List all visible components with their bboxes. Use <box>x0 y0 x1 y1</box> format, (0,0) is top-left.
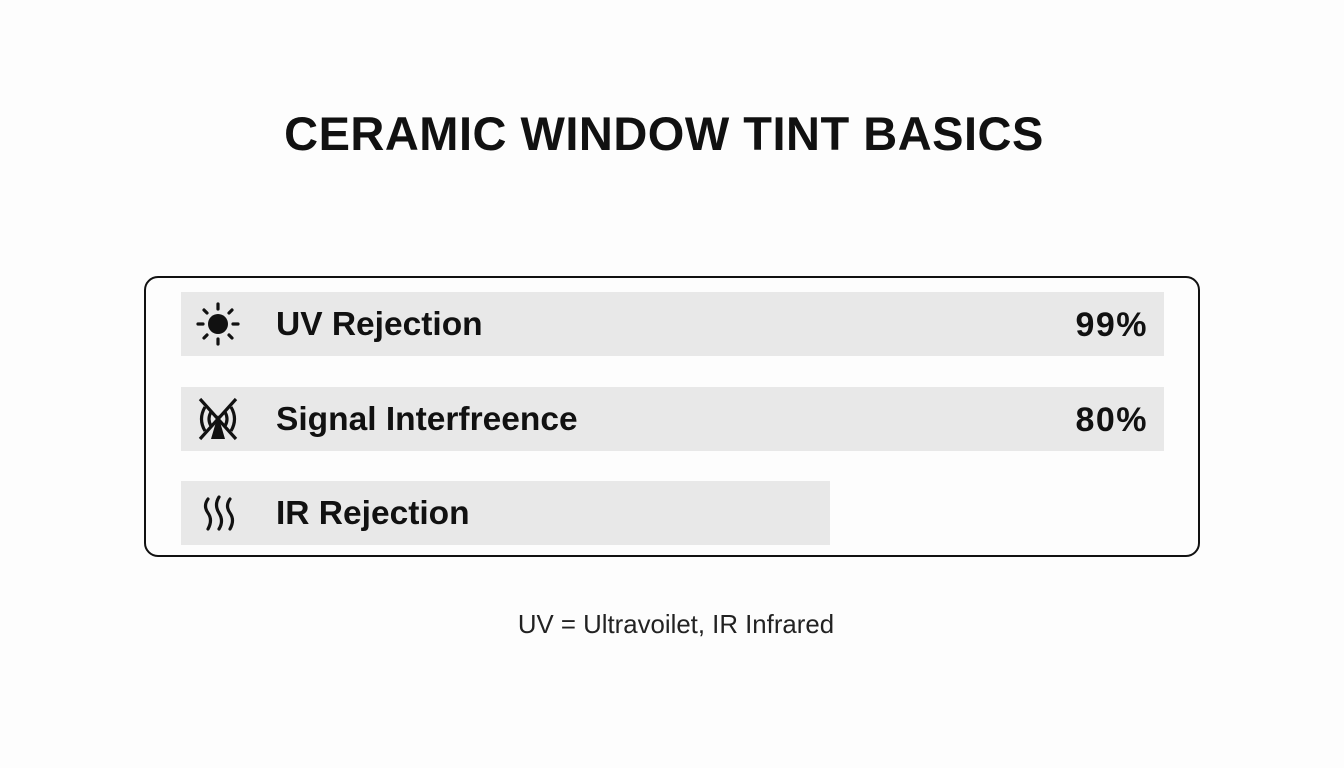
label: Signal Interference: Signal Interfreence <box>276 401 578 438</box>
value: 80%: 80% <box>1075 401 1148 439</box>
footnote: UV = Ultravoilet, IR Infrared <box>518 611 834 639</box>
icon: signal blocked <box>198 398 238 440</box>
row: Signal Interference <box>181 387 1164 451</box>
label: UV Rejection: UV Rejection <box>276 306 483 343</box>
label: IR Rejection: IR Rejection <box>276 495 470 532</box>
icon: heat waves <box>204 495 234 531</box>
row: IR Rejection <box>181 481 830 545</box>
value: 99%: 99% <box>1075 306 1148 344</box>
row: UV Rejection <box>181 292 1164 356</box>
panel: metrics <box>144 276 1200 557</box>
title: CERAMIC WINDOW TINT BASICS <box>284 107 1044 160</box>
icon: sun <box>196 302 240 346</box>
